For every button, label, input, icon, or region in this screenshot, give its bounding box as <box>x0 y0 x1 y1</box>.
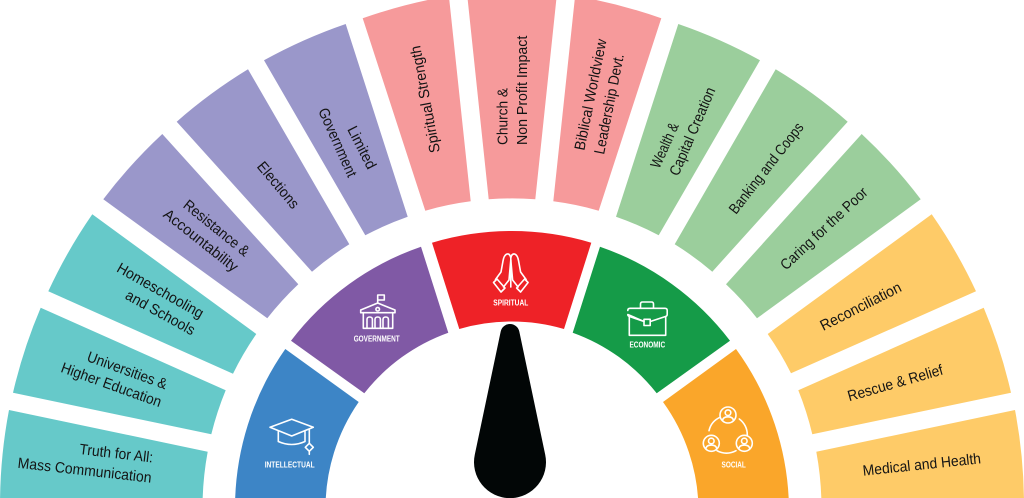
text: Homeschooling and Schools: and Schools <box>122 287 198 339</box>
panel: Social sector <box>663 349 789 498</box>
text: Church and Non Profit Impact: Non Profit Impact <box>514 35 531 145</box>
label: ECONOMIC: ECONOMIC <box>629 339 665 349</box>
text: Wealth and Capital Creation: Capital Creation <box>666 85 719 178</box>
text: Resistance and Accountability: Resistance & <box>180 197 253 260</box>
text: Biblical Worldview Leadership Devt.: Leadership Devt. <box>591 52 628 156</box>
text: Resistance and Accountability: Accountability <box>160 206 242 276</box>
panel: Medical and Health <box>816 410 1024 498</box>
panel: Wealth and Capital Creation <box>616 24 760 235</box>
panel: Banking and Coops <box>675 69 848 272</box>
label: SOCIAL: SOCIAL <box>722 459 746 469</box>
panel: Reconciliation <box>768 214 976 373</box>
panel: Biblical Worldview <box>553 0 661 211</box>
text: Biblical Worldview Leadership Devt.: Biblical Worldview <box>572 38 611 152</box>
text: Limited Government: Government <box>314 105 360 181</box>
text: Reconciliation: Reconciliation <box>817 279 904 335</box>
text: Limited Government: Limited <box>343 123 379 172</box>
text: Elections: Elections <box>253 158 302 212</box>
panel: Rescue and Relief <box>798 308 1011 434</box>
icon: graduation cap <box>270 419 313 454</box>
label: GOVERNMENT: GOVERNMENT <box>354 333 400 343</box>
text: Church and Non Profit Impact: Church & <box>494 88 511 145</box>
panel: Truth for All <box>0 410 208 498</box>
icon: praying hands <box>494 254 528 292</box>
outer ring: government topics <box>103 24 408 318</box>
panel: Caring for the Poor <box>726 134 921 318</box>
gauge needle <box>474 324 546 498</box>
text: Biblical Worldview Leadership Devt. <box>572 38 628 156</box>
label: INTELLECTUAL: INTELLECTUAL <box>265 459 315 469</box>
panel: Resistance and Accountability <box>103 134 298 318</box>
panel: Economic sector <box>573 247 730 393</box>
panel: Government sector <box>291 247 448 393</box>
text: Banking and Coops: Banking and Coops <box>726 120 807 217</box>
panel: Intellectual sector <box>235 349 359 498</box>
icon: briefcase <box>628 302 667 335</box>
text: Truth for All Mass Communication <box>17 441 154 487</box>
panel: Spiritual Strength <box>363 0 471 211</box>
text: Caring for the Poor: Caring for the Poor <box>777 184 871 274</box>
text: Spiritual Strength: Spiritual Strength <box>407 44 444 154</box>
text: Truth for All Mass Communication: Mass Communication <box>17 455 152 487</box>
text: Truth for All Mass Communication: Truth for All: <box>79 441 154 466</box>
text: Wealth and Capital Creation <box>647 85 719 178</box>
panel: Limited Government <box>264 24 408 235</box>
outer ring: spiritual topics <box>363 0 661 211</box>
icon: three connected people <box>703 407 752 453</box>
outer ring: economic topics <box>616 24 921 318</box>
text: Universities and Higher Education: Higher Education <box>59 359 164 411</box>
text: Homeschooling and Schools: Homeschooling <box>114 260 207 322</box>
outer ring: social topics <box>768 214 1024 498</box>
outer ring: intellectual topics <box>0 214 256 498</box>
icon: school building <box>361 295 395 328</box>
text: Rescue and Relief: Rescue & Relief <box>846 361 946 405</box>
label: SPIRITUAL: SPIRITUAL <box>493 297 528 307</box>
panel: Universities <box>13 308 226 434</box>
text: Wealth and Capital Creation: Wealth & <box>647 120 683 171</box>
panel: Homeschooling <box>48 214 256 374</box>
text: Medical and Health: Medical and Health <box>862 450 982 480</box>
panel: Spiritual sector <box>432 231 591 329</box>
text: Universities and Higher Education: Universities & <box>85 348 169 393</box>
text: Church and Non Profit Impact <box>494 35 531 145</box>
panel: Church and Non Profit Impact <box>467 0 557 199</box>
panel: Elections <box>177 69 349 272</box>
